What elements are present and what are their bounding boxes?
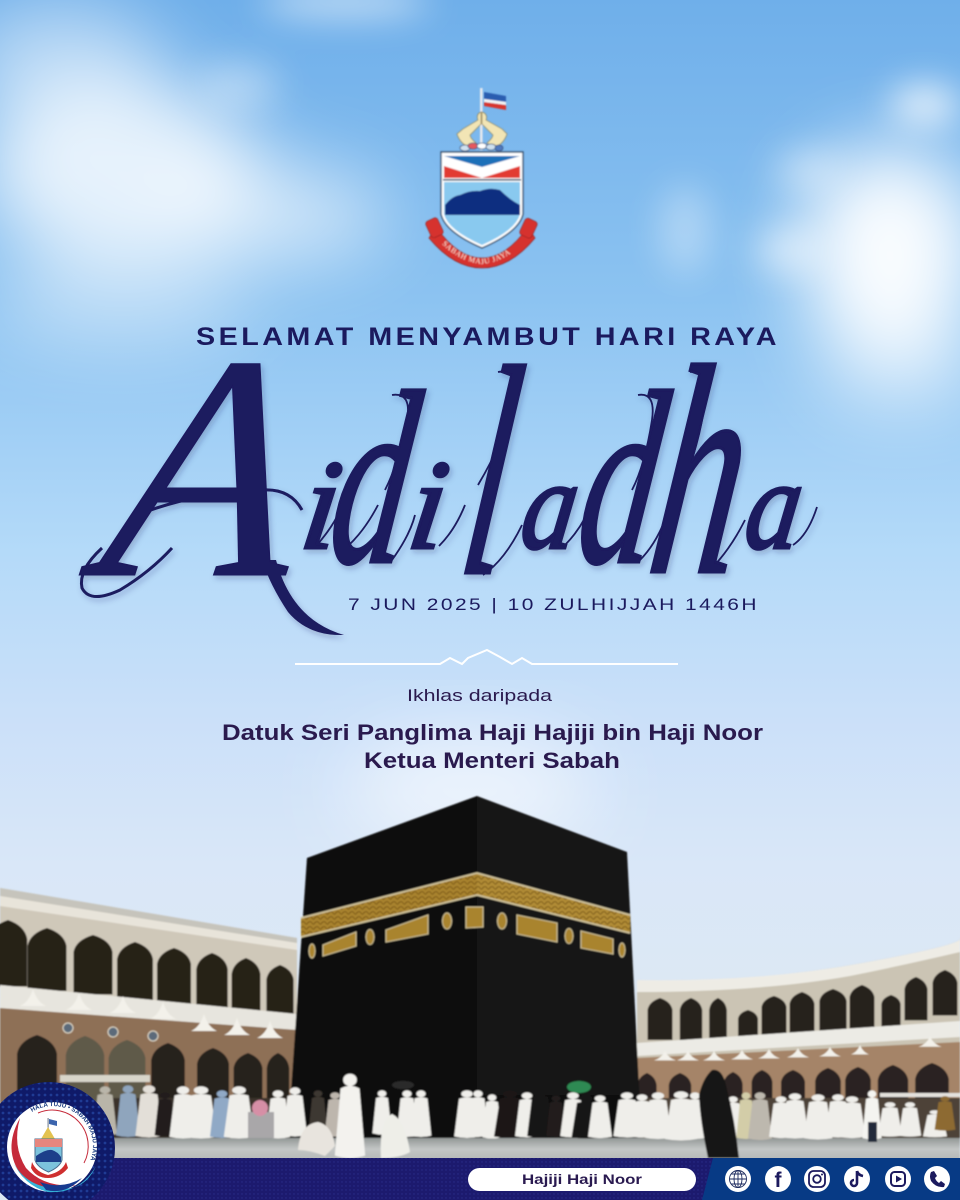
panel: social links xyxy=(702,1158,960,1200)
mini emblem xyxy=(31,1118,68,1178)
pill: account name xyxy=(468,1168,696,1191)
date line: 7 JUN 2025 | 10 ZULHIJJAH 1446H xyxy=(348,595,759,614)
foreground pilgrim prostrating xyxy=(298,1122,335,1156)
icon: motto ribbon: SABAH MAJU JAYA xyxy=(442,240,512,266)
logo badge: Hala Tuju Sabah Maju Jaya: HALA TUJU • SABAH MAJU JAYA xyxy=(30,1102,98,1160)
heading: Aidiladha script title xyxy=(67,289,832,645)
script flourishes xyxy=(81,372,817,635)
icon: motto ribbon xyxy=(424,216,538,270)
sender block xyxy=(222,686,763,773)
gold panels xyxy=(309,907,625,958)
foreground pilgrim in black abaya xyxy=(699,1070,739,1158)
heading: Aidiladha script title: d xyxy=(565,341,681,616)
icon: phone xyxy=(924,1166,950,1192)
foreground pilgrim seated xyxy=(381,1114,410,1158)
heading: Aidiladha script title: a xyxy=(738,434,812,576)
icon: video xyxy=(885,1166,911,1192)
divider with mountain silhouette xyxy=(295,650,678,664)
heading: greeting: SELAMAT MENYAMBUT HARI RAYA xyxy=(196,323,780,351)
right colonnade xyxy=(637,938,960,1119)
pilgrims xyxy=(93,1070,960,1158)
icon: shield xyxy=(441,152,523,248)
heading: Aidiladha script title: d xyxy=(317,341,433,616)
floor xyxy=(0,1137,960,1161)
heading: Aidiladha script title: a xyxy=(514,434,588,576)
clouds xyxy=(0,0,960,845)
emblem: Sabah coat of arms xyxy=(424,87,538,270)
icon: website xyxy=(725,1166,751,1192)
logo badge: Hala Tuju Sabah Maju Jaya xyxy=(0,1082,115,1200)
heading: Aidiladha script title: i xyxy=(401,434,457,576)
left colonnade xyxy=(0,888,297,1106)
footer bar xyxy=(90,1158,960,1200)
icon: facebook xyxy=(765,1166,791,1192)
text: sincerely from: Ikhlas daripada xyxy=(407,686,553,705)
heading: Aidiladha script title: h xyxy=(635,305,770,638)
foreground pilgrim standing xyxy=(335,1074,365,1158)
text: title: Ketua Menteri Sabah xyxy=(364,748,620,773)
heading: Aidiladha script title: l xyxy=(447,306,538,639)
gold band xyxy=(301,873,630,937)
Kaaba xyxy=(290,796,640,1112)
icon: facebook: f xyxy=(774,1169,782,1192)
text: name: Datuk Seri Panglima Haji Hajiji bin Haji Noor xyxy=(222,720,763,745)
heading: Aidiladha script title: i xyxy=(294,434,350,576)
icon: arms holding pole xyxy=(457,112,507,147)
icon: wreath xyxy=(460,143,503,151)
photo: Masjidil Haram scene xyxy=(0,796,960,1161)
heading: Aidiladha script title: A xyxy=(67,289,331,645)
pill: account name: Hajiji Haji Noor xyxy=(522,1171,643,1187)
icon: instagram xyxy=(804,1166,830,1192)
icon: tiktok xyxy=(844,1166,870,1192)
swoosh xyxy=(11,1118,76,1189)
icon: flag on pole xyxy=(480,88,506,150)
